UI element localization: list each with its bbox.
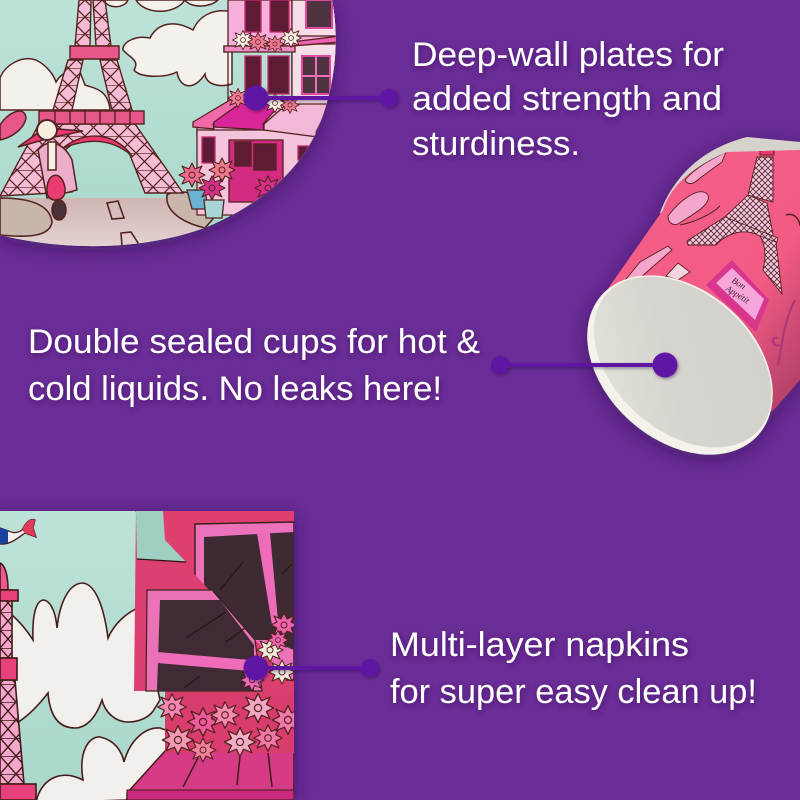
building (187, 0, 342, 218)
panel: napkin (0, 511, 304, 800)
text: cups: Double sealed cups for hot & (28, 323, 480, 361)
cup base (552, 239, 800, 491)
cup Eiffel tower (687, 149, 782, 294)
folded flap (134, 511, 294, 691)
text: cups (28, 323, 480, 408)
road (0, 198, 204, 246)
cup scooter and curls (625, 152, 726, 280)
lower building awning (127, 751, 294, 800)
pink wall under flap (165, 691, 294, 753)
napkin tower (0, 563, 36, 800)
text: napkins: for super easy clean up! (390, 673, 757, 711)
flowers on plate (179, 28, 301, 200)
cup rim (660, 137, 800, 225)
text: napkins (390, 626, 757, 711)
cup body (605, 150, 800, 412)
callout: cup connector (491, 352, 678, 378)
text: plates: added strength and (412, 80, 722, 118)
flap window (146, 590, 262, 691)
upper window (195, 522, 294, 680)
clouds on plate (0, 0, 232, 110)
text: plates (412, 36, 724, 163)
Bon Appetit sign (706, 260, 769, 332)
Eiffel tower on plate (0, 0, 183, 196)
scooter (0, 111, 83, 220)
flap flowers (240, 613, 297, 691)
callout: plate connector (244, 86, 398, 110)
awnings (192, 100, 236, 130)
text: napkins: Multi-layer napkins (390, 626, 689, 664)
top layer behind fold (135, 511, 294, 691)
napkin flower row (158, 694, 304, 762)
napkin clouds (12, 582, 165, 800)
panel: paper plate (0, 0, 342, 250)
text: cups: cold liquids. No leaks here! (28, 370, 442, 408)
callout: napkin connector (244, 656, 379, 680)
Bon Appetit sign: Bon (730, 275, 748, 292)
text: plates: sturdiness. (412, 125, 580, 163)
panel: paper cup (578, 132, 800, 468)
flag (0, 519, 36, 544)
text: plates: Deep-wall plates for (412, 36, 724, 74)
Bon Appetit sign: Appétit (723, 283, 752, 306)
